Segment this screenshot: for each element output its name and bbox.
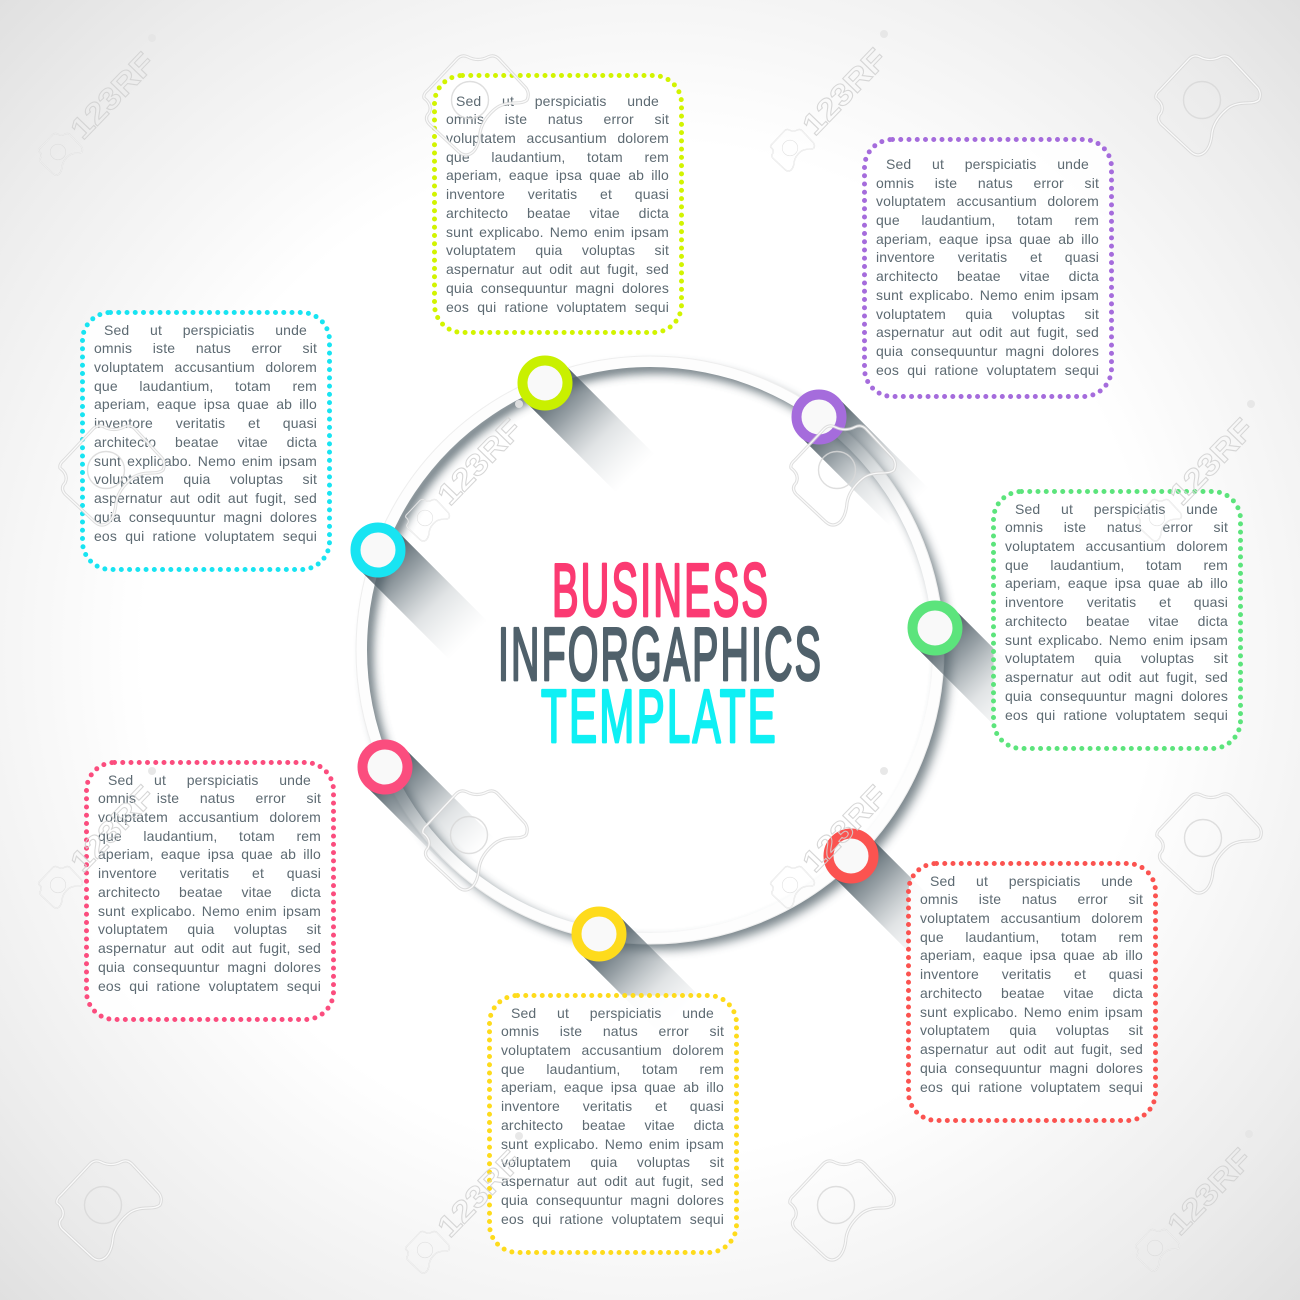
marker: green (912, 606, 958, 650)
panel: pink text box: eos qui ratione voluptatem sequi (98, 978, 321, 994)
panel: yellow text box: que laudantium, totam rem (501, 1061, 724, 1077)
panel: red text box: voluptatem accusantium dolorem (920, 910, 1143, 926)
panel: yellow text box (487, 993, 739, 1255)
panel: pink text box: Sed ut perspiciatis unde (108, 772, 311, 788)
panel: lime text box: aperiam, eaque ipsa quae ab illo (446, 167, 669, 183)
panel: purple text box: que laudantium, totam rem (876, 212, 1099, 228)
panel: green text box: quia consequuntur magni dolores (1005, 688, 1228, 704)
title (498, 548, 823, 758)
panel: cyan text box: aperiam, eaque ipsa quae ab illo (94, 396, 317, 412)
watermark: 123RF logos: 123RF (431, 1145, 529, 1244)
panel: green text box: architecto beatae vitae dicta (1005, 613, 1228, 629)
panel: pink text box: voluptatem accusantium dolorem (98, 809, 321, 825)
panel: red text box: aspernatur aut odit aut fugit, sed (920, 1041, 1143, 1057)
panel: red text box: aperiam, eaque ipsa quae ab illo (920, 947, 1143, 963)
panel: lime text box: architecto beatae vitae dicta (446, 205, 669, 221)
panel: green text box (991, 489, 1243, 751)
panel: cyan text box: inventore veritatis et quasi (94, 415, 317, 431)
panel: lime text box: voluptatem accusantium dolorem (446, 130, 669, 146)
panel: cyan text box: eos qui ratione voluptatem sequi (94, 528, 317, 544)
panel: green text box: sunt explicabo. Nemo enim ipsam (1005, 632, 1228, 648)
panel: yellow text box: sunt explicabo. Nemo enim ipsam (501, 1136, 724, 1152)
panel: pink text box: quia consequuntur magni dolores (98, 959, 321, 975)
panel: purple text box: eos qui ratione voluptatem sequi (876, 362, 1099, 378)
watermark: 123RF logos: 123RF (64, 47, 162, 146)
panel: yellow text box: aspernatur aut odit aut fugit, sed (501, 1173, 724, 1189)
panel: cyan text box: Sed ut perspiciatis unde (104, 322, 307, 338)
panel: pink text box: inventore veritatis et quasi (98, 865, 321, 881)
marker: pink (362, 744, 408, 790)
panel: yellow text box: voluptatem accusantium dolorem (501, 1042, 724, 1058)
marker: purple (796, 394, 842, 440)
panel: green text box: voluptatem quia voluptas sit (1005, 650, 1228, 666)
watermark: 123RF logos: 123RF (1163, 413, 1261, 512)
panel: cyan text box: omnis iste natus error sit (94, 340, 317, 356)
watermark: 123RF logos: 123RF (1161, 1143, 1259, 1242)
panel: lime text box: sunt explicabo. Nemo enim ipsam (446, 224, 669, 240)
marker: red (828, 834, 874, 878)
panel: purple text box (862, 137, 1114, 399)
panel: cyan text box (80, 310, 332, 572)
panel: green text box: aspernatur aut odit aut fugit, sed (1005, 669, 1228, 685)
panel: lime text box: inventore veritatis et quasi (446, 186, 669, 202)
panel: cyan text box: architecto beatae vitae dicta (94, 434, 317, 450)
panel: lime text box (432, 73, 684, 335)
panel: purple text box: omnis iste natus error sit (876, 175, 1099, 191)
panel: yellow text box: eos qui ratione voluptatem sequi (501, 1210, 724, 1226)
watermark: 123RF logos: 123RF (796, 780, 894, 879)
title: BUSINESS (552, 548, 770, 632)
panel: red text box: sunt explicabo. Nemo enim ipsam (920, 1004, 1143, 1020)
panel: yellow text box: omnis iste natus error sit (501, 1023, 724, 1039)
panel: lime text box: omnis iste natus error sit (446, 111, 669, 127)
panel: red text box: omnis iste natus error sit (920, 891, 1143, 907)
panel: purple text box: quia consequuntur magni dolores (876, 343, 1099, 359)
panel: pink text box: aspernatur aut odit aut fugit, sed (98, 940, 321, 956)
central circle ring (356, 356, 950, 950)
panel: cyan text box: quia consequuntur magni dolores (94, 509, 317, 525)
marker: cyan (356, 528, 400, 572)
panel: purple text box: inventore veritatis et quasi (876, 249, 1099, 265)
panel: lime text box: que laudantium, totam rem (446, 149, 669, 165)
panel: purple text box: aperiam, eaque ipsa quae ab illo (876, 231, 1099, 247)
panel: green text box: aperiam, eaque ipsa quae ab illo (1005, 575, 1228, 591)
panel: pink text box: omnis iste natus error sit (98, 790, 321, 806)
panel: cyan text box: sunt explicabo. Nemo enim ipsam (94, 453, 317, 469)
panel: red text box: Sed ut perspiciatis unde (930, 873, 1133, 889)
panel: pink text box: voluptatem quia voluptas sit (98, 921, 321, 937)
panel: red text box (906, 861, 1158, 1123)
panel: cyan text box: que laudantium, totam rem (94, 378, 317, 394)
panel: yellow text box: aperiam, eaque ipsa quae ab illo (501, 1079, 724, 1095)
panel: lime text box: voluptatem quia voluptas sit (446, 242, 669, 258)
panel: red text box: eos qui ratione voluptatem sequi (920, 1078, 1143, 1094)
panel: green text box: omnis iste natus error sit (1005, 519, 1228, 535)
panel: yellow text box: architecto beatae vitae dicta (501, 1117, 724, 1133)
marker: lime (522, 360, 568, 406)
panel: pink text box: aperiam, eaque ipsa quae ab illo (98, 846, 321, 862)
panel: green text box: que laudantium, totam rem (1005, 557, 1228, 573)
panel: red text box: que laudantium, totam rem (920, 929, 1143, 945)
panel: purple text box: architecto beatae vitae dicta (876, 268, 1099, 284)
panel: pink text box (84, 760, 336, 1022)
marker long shadows (359, 364, 1045, 1044)
panel: yellow text box: quia consequuntur magni dolores (501, 1192, 724, 1208)
panel: red text box: voluptatem quia voluptas sit (920, 1022, 1143, 1038)
title: TEMPLATE (541, 674, 778, 758)
panel: green text box: Sed ut perspiciatis unde (1015, 501, 1218, 517)
panel: red text box: inventore veritatis et quasi (920, 966, 1143, 982)
watermark: 123RF logos: 123RF (64, 780, 162, 879)
watermark: 123RF logos: 123RF (796, 43, 894, 142)
panel: lime text box: eos qui ratione voluptatem sequi (446, 298, 669, 314)
panel: lime text box: Sed ut perspiciatis unde (456, 93, 659, 109)
panel: cyan text box: voluptatem accusantium dolorem (94, 359, 317, 375)
panel: cyan text box: voluptatem quia voluptas sit (94, 471, 317, 487)
panel: green text box: inventore veritatis et quasi (1005, 594, 1228, 610)
panel: pink text box: sunt explicabo. Nemo enim ipsam (98, 903, 321, 919)
panel: purple text box: Sed ut perspiciatis unde (886, 156, 1089, 172)
panel: purple text box: sunt explicabo. Nemo enim ipsam (876, 287, 1099, 303)
marker: yellow (576, 912, 622, 956)
panel: yellow text box: inventore veritatis et quasi (501, 1098, 724, 1114)
title: INFORGAPHICS (498, 612, 823, 696)
panel: lime text box: aspernatur aut odit aut fugit, sed (446, 261, 669, 277)
panel: yellow text box: Sed ut perspiciatis unde (511, 1005, 714, 1021)
panel: pink text box: architecto beatae vitae dicta (98, 884, 321, 900)
watermark: 123RF logos: 123RF (431, 413, 529, 512)
panel: green text box: eos qui ratione voluptatem sequi (1005, 706, 1228, 722)
panel: pink text box: que laudantium, totam rem (98, 828, 321, 844)
panel: green text box: voluptatem accusantium dolorem (1005, 538, 1228, 554)
panel: purple text box: voluptatem quia voluptas sit (876, 306, 1099, 322)
panel: purple text box: voluptatem accusantium dolorem (876, 193, 1099, 209)
panel: purple text box: aspernatur aut odit aut fugit, sed (876, 324, 1099, 340)
panel: yellow text box: voluptatem quia voluptas sit (501, 1154, 724, 1170)
panel: cyan text box: aspernatur aut odit aut fugit, sed (94, 490, 317, 506)
panel: lime text box: quia consequuntur magni dolores (446, 280, 669, 296)
panel: red text box: architecto beatae vitae dicta (920, 985, 1143, 1001)
panel: red text box: quia consequuntur magni dolores (920, 1060, 1143, 1076)
